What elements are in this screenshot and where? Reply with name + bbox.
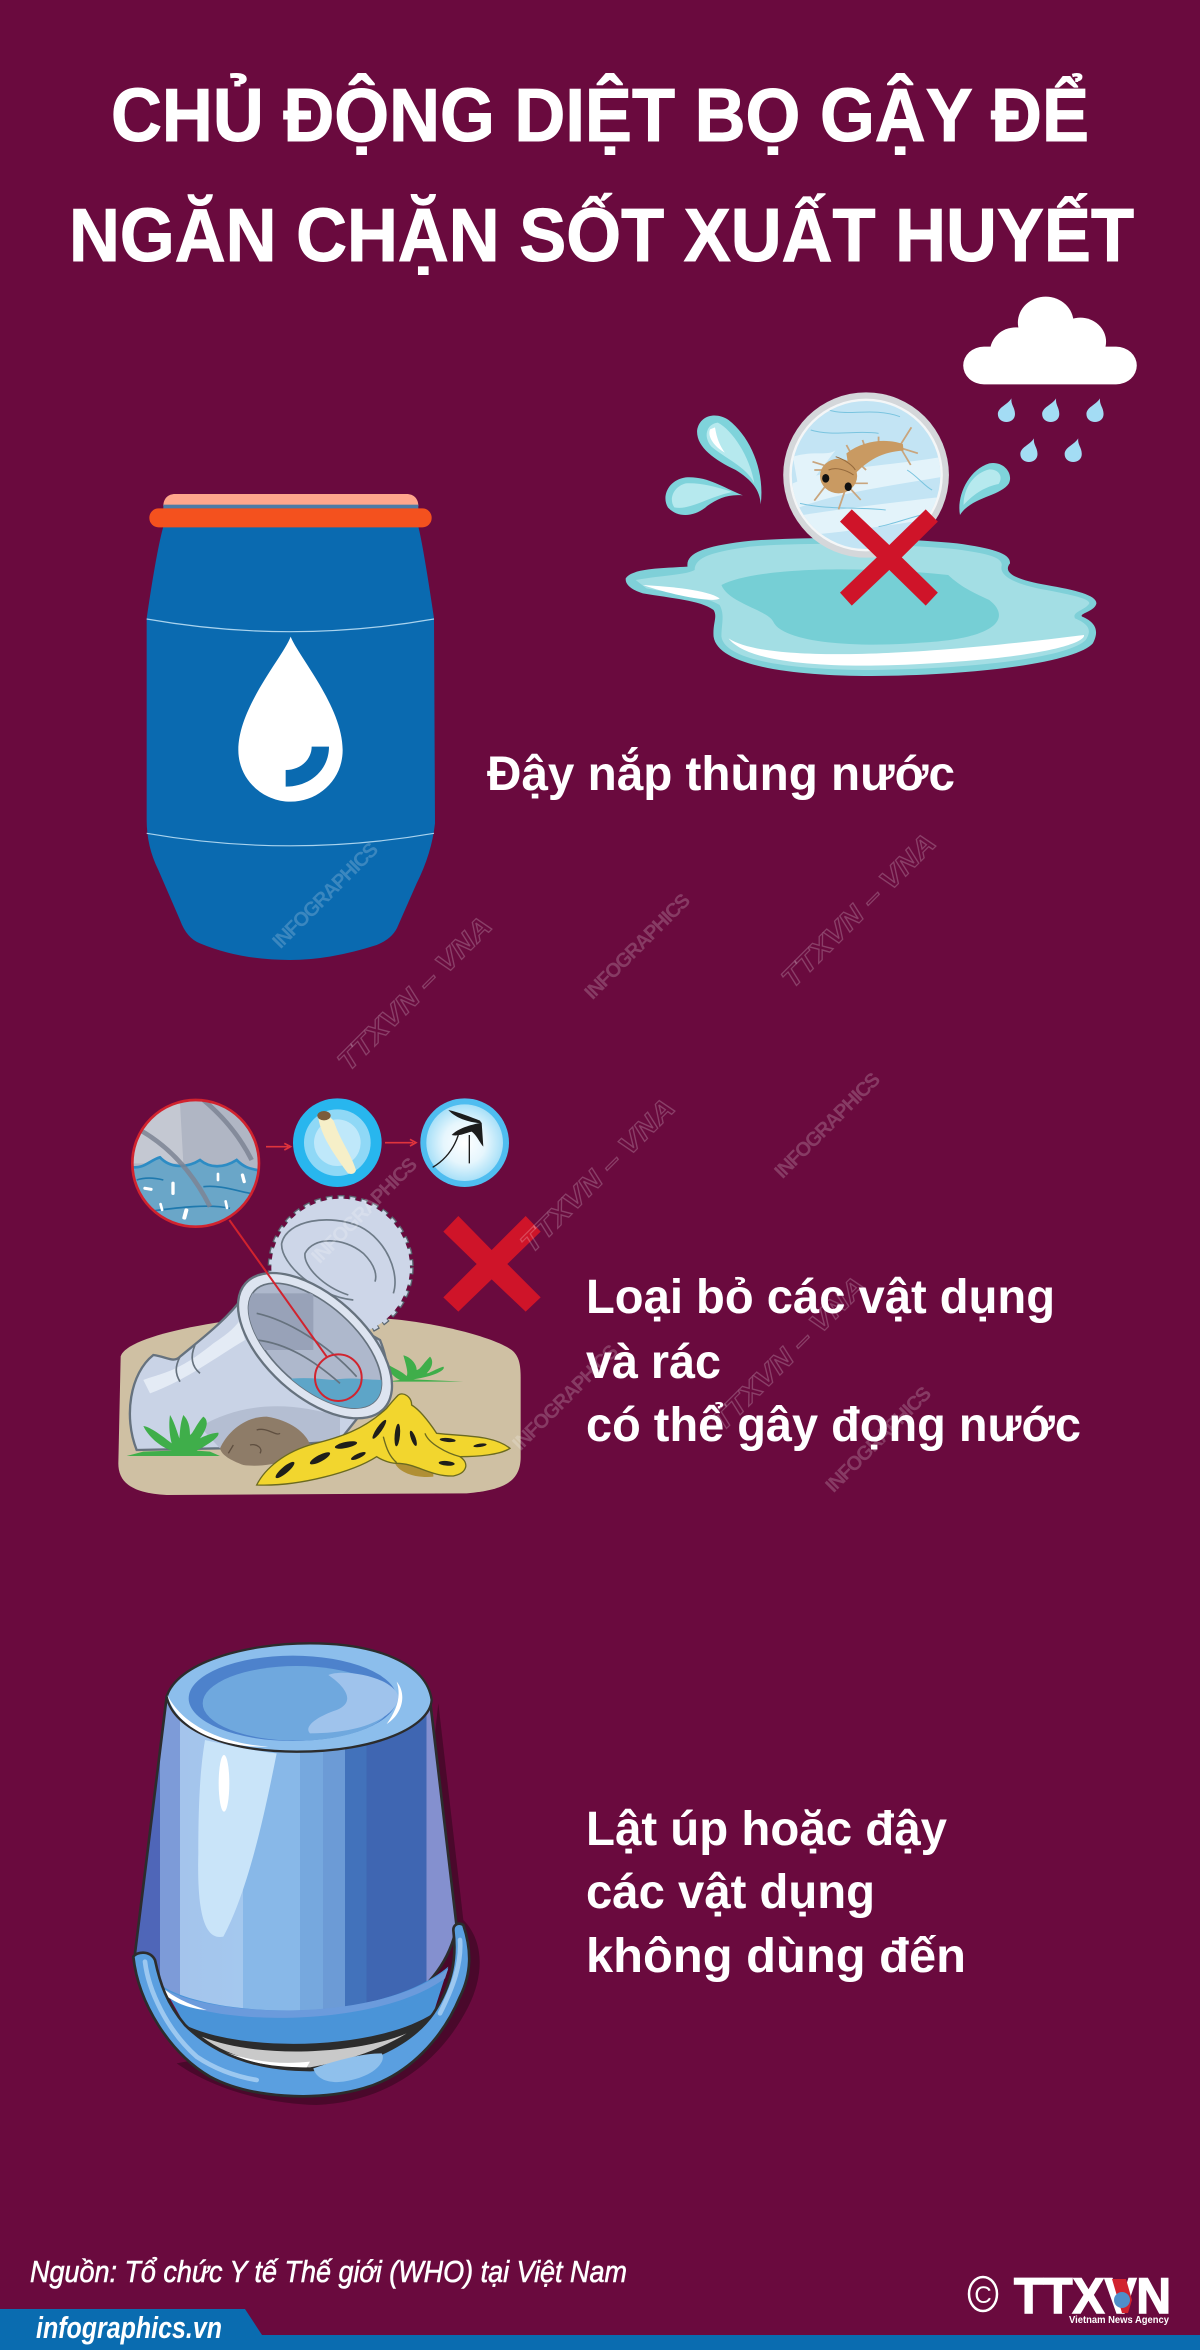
watermarks: TTXVN – VNA — [776, 828, 942, 994]
icon: red cross — [443, 1216, 541, 1312]
illustration: water barrel — [147, 494, 435, 960]
source line: Nguồn: Tổ chức Y tế Thế giới (WHO) tại Việt Nam — [30, 2254, 627, 2289]
copyright mark — [969, 2277, 997, 2311]
arrow: water to larva — [266, 1143, 291, 1150]
watermarks — [268, 828, 942, 1497]
text: remove items and trash — [586, 1271, 1081, 1452]
text: turn over or cover unused items — [586, 1803, 966, 1983]
illustration: discarded can and garbage — [118, 1098, 541, 1495]
icon: water splash drops — [665, 416, 1010, 515]
magnifier lens with larva — [783, 392, 949, 558]
callout: zoom pointer — [229, 1220, 362, 1401]
watermarks: INFOGRAPHICS — [580, 889, 695, 1004]
text: remove items and trash: có thể gây đọng nước — [586, 1399, 1081, 1452]
watermarks: INFOGRAPHICS — [770, 1068, 885, 1183]
puddle — [626, 538, 1096, 676]
back grass — [387, 1355, 463, 1382]
watermarks: TTXVN – VNA — [706, 1271, 872, 1437]
can lid — [271, 1199, 410, 1336]
watermarks: TTXVN – VNA — [515, 1093, 681, 1259]
can body — [128, 1272, 394, 1452]
text: remove items and trash: và rác — [586, 1336, 721, 1389]
logo: TTXVN Vietnam News Agency: TTXVN — [1014, 2268, 1171, 2324]
barrel rim band — [149, 508, 432, 527]
title: CHỦ ĐỘNG DIỆT BỌ GẬY ĐỂ — [111, 73, 1089, 157]
watermarks: INFOGRAPHICS — [821, 1382, 936, 1497]
ground patch — [118, 1318, 521, 1495]
bucket top — [167, 1643, 432, 1752]
illustration: puddle, larva lens and rain cloud — [626, 297, 1137, 676]
watermarks: INFOGRAPHICS — [508, 1340, 623, 1455]
larva — [812, 427, 918, 509]
text: remove items and trash: Loại bỏ các vật dụng — [586, 1271, 1055, 1324]
bucket body — [135, 1697, 457, 2045]
watermarks: INFOGRAPHICS — [268, 838, 383, 953]
watermarks: TTXVN – VNA — [332, 911, 498, 1077]
can mouth — [212, 1246, 418, 1445]
barrel body — [147, 527, 435, 960]
icon: rain drops — [998, 398, 1104, 462]
title: NGĂN CHẶN SỐT XUẤT HUYẾT — [69, 193, 1134, 277]
illustration: overturned bucket — [133, 1643, 480, 2105]
icon: water drop — [238, 637, 343, 802]
copyright mark: C — [974, 2282, 992, 2309]
magnified water with larvae — [130, 1100, 263, 1230]
bucket handle — [133, 1924, 469, 2096]
text: cover water barrels: Đậy nắp thùng nước — [487, 746, 955, 801]
icon: rain cloud — [963, 297, 1137, 384]
text: turn over or cover unused items: các vật dụng — [586, 1866, 875, 1919]
arrow: larva to mosquito — [385, 1139, 416, 1146]
watermarks: INFOGRAPHICS — [307, 1153, 422, 1268]
rock — [220, 1417, 310, 1466]
website label: infographics.vn — [36, 2310, 222, 2345]
title — [69, 73, 1134, 277]
banana peel — [257, 1394, 510, 1485]
icon: larva circle — [293, 1098, 382, 1187]
icon: red cross — [840, 509, 938, 606]
footer band — [0, 2309, 1200, 2350]
front grass — [127, 1415, 220, 1456]
text: turn over or cover unused items: Lật úp hoặc đậy — [586, 1803, 947, 1856]
icon: mosquito circle — [420, 1098, 509, 1187]
bucket bottom rim — [163, 1967, 448, 2045]
bucket shadow — [177, 1703, 480, 2105]
barrel lid — [163, 494, 418, 506]
text: turn over or cover unused items: không dùng đến — [586, 1930, 966, 1983]
logo: TTXVN Vietnam News Agency: Vietnam News Agency — [1069, 2315, 1169, 2326]
bucket underside gap — [185, 2013, 433, 2075]
